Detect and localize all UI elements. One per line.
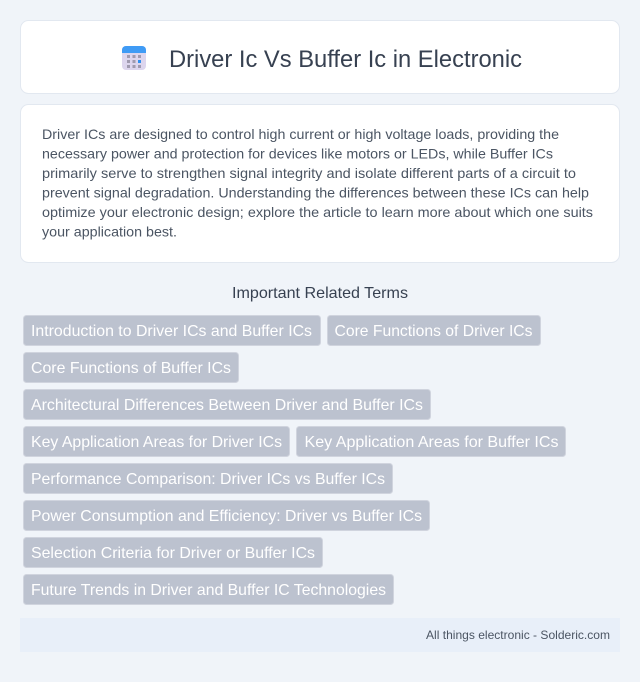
tag: core functions of buffer ICs: Core Functions of Buffer ICs	[31, 360, 231, 377]
tag: architectural differences: Architectural Differences Between Driver and Buffer ICs	[31, 397, 423, 414]
tag: core functions of driver ICs: Core Functions of Driver ICs	[334, 323, 532, 340]
text block: description: prevent signal degradation. Understanding the differences between these ICs can help	[42, 184, 589, 200]
tag: application areas for buffer ICs: Key Application Areas for Buffer ICs	[304, 434, 558, 451]
tag: application areas for driver ICs	[24, 426, 290, 456]
tag: selection criteria: Selection Criteria for Driver or Buffer ICs	[31, 545, 315, 562]
footer credit: All things electronic - Solderic.com	[426, 628, 610, 642]
tag: performance comparison: Performance Comparison: Driver ICs vs Buffer ICs	[31, 471, 385, 488]
tag: future trends	[24, 574, 394, 604]
tag: core functions of driver ICs	[328, 316, 540, 346]
header panel	[20, 20, 620, 94]
tag: application areas for buffer ICs	[296, 426, 566, 456]
panel: related term tags	[24, 316, 566, 604]
tag: future trends: Future Trends in Driver and Buffer IC Technologies	[31, 582, 386, 599]
title: Driver Ic Vs Buffer Ic in Electronic	[169, 46, 522, 73]
icon: calendar grid	[122, 46, 146, 70]
text block: description: primarily serve to strengthen signal integrity and isolate different parts of a circuit to	[42, 165, 576, 181]
tag: introduction	[24, 316, 320, 346]
tag: architectural differences	[24, 390, 430, 420]
tag: selection criteria	[24, 538, 322, 568]
text block: description: optimize your electronic design; explore the article to learn more about which one suits	[42, 204, 593, 220]
tag: introduction: Introduction to Driver ICs and Buffer ICs	[31, 323, 312, 340]
text block: description: Driver ICs are designed to control high current or high voltage loads, providing the	[42, 126, 559, 142]
footer	[20, 618, 620, 652]
text block: description	[42, 126, 593, 240]
tag: core functions of buffer ICs	[24, 352, 238, 382]
text block: description: necessary power and protection for devices like motors or LEDs, while Buffer ICs	[42, 146, 553, 162]
heading: important related terms: Important Related Terms	[232, 285, 408, 302]
tag: power consumption: Power Consumption and Efficiency: Driver vs Buffer ICs	[31, 508, 422, 525]
panel: introduction paragraph	[20, 104, 620, 262]
tag: application areas for driver ICs: Key Application Areas for Driver ICs	[31, 434, 282, 451]
text block: description: your application best.	[42, 224, 177, 240]
tag: performance comparison	[24, 464, 392, 494]
tag: power consumption	[24, 500, 430, 530]
